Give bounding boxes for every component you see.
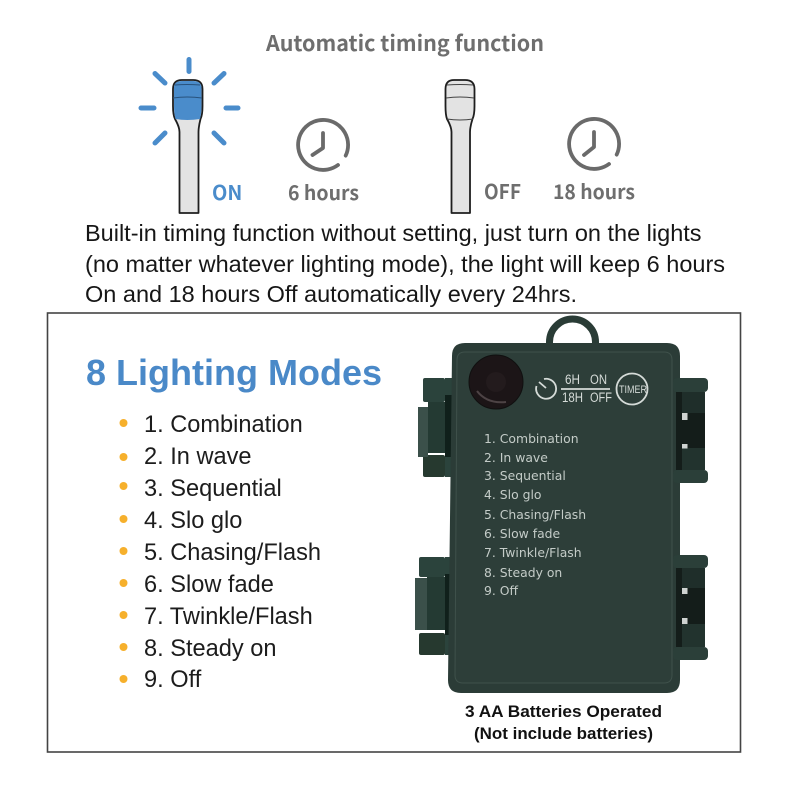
caption: batteries: 3 AA Batteries Operated <box>465 702 662 721</box>
list of modes: 6. Slow fade <box>144 572 274 598</box>
printed mode list: 4. Slo glo <box>484 487 541 502</box>
list of modes: 1. Combination <box>144 412 303 438</box>
button <box>469 355 523 409</box>
printed mode list: 3. Sequential <box>484 468 566 483</box>
icon: clock 6 hours <box>298 120 348 170</box>
printed mode list: 6. Slow fade <box>484 526 560 541</box>
printed mode list: 7. Twinkle/Flash <box>484 545 582 560</box>
list of modes: 9. Off <box>144 667 202 693</box>
timer legend <box>536 374 648 404</box>
heading: 8 Lighting Modes: 8 Lighting Modes <box>86 352 382 393</box>
device: battery box: TIMER <box>619 384 647 396</box>
description text: (no matter whatever lighting mode), the light will keep 6 hours <box>85 251 725 277</box>
icon: clock 18 hours <box>569 119 619 169</box>
list of modes: 7. Twinkle/Flash <box>144 604 313 630</box>
icon: unlit lamp off <box>446 80 474 213</box>
icon: light rays <box>141 60 238 143</box>
panel: lighting modes <box>48 313 740 752</box>
device: battery box: OFF <box>590 390 612 405</box>
description text <box>85 220 725 307</box>
description text: On and 18 hours Off automatically every 24hrs. <box>85 281 577 307</box>
housing <box>448 343 680 693</box>
label: 18 hours: 18 hours <box>553 176 635 205</box>
device: battery box: 6H <box>565 372 580 387</box>
hanging loop <box>550 319 596 346</box>
device: battery box: ON <box>590 372 607 387</box>
caption: batteries <box>465 702 662 743</box>
left hinges <box>415 378 457 655</box>
printed mode list <box>484 431 586 598</box>
list of modes: 2. In wave <box>144 444 252 470</box>
device: battery box: 18H <box>562 390 583 405</box>
right latches <box>673 378 708 660</box>
device: battery box <box>415 319 708 693</box>
printed mode list: 2. In wave <box>484 450 548 465</box>
caption: batteries: (Not include batteries) <box>474 724 653 743</box>
list of modes: 3. Sequential <box>144 476 282 502</box>
printed mode list: 8. Steady on <box>484 565 562 580</box>
list of modes: 8. Steady on <box>144 636 276 662</box>
description text: Built-in timing function without setting, just turn on the lights <box>85 220 702 246</box>
icon: lit lamp on <box>141 60 238 213</box>
label: OFF: OFF <box>484 176 521 205</box>
printed mode list: 1. Combination <box>484 431 579 446</box>
list bullets <box>120 419 128 683</box>
list of modes: 4. Slo glo <box>144 508 242 534</box>
printed mode list: 9. Off <box>484 583 519 598</box>
label: ON: ON <box>212 177 242 206</box>
label: 6 hours: 6 hours <box>288 177 359 206</box>
printed mode list: 5. Chasing/Flash <box>484 507 586 522</box>
list of modes <box>144 412 321 693</box>
title: Automatic timing function <box>265 27 544 58</box>
list of modes: 5. Chasing/Flash <box>144 540 321 566</box>
